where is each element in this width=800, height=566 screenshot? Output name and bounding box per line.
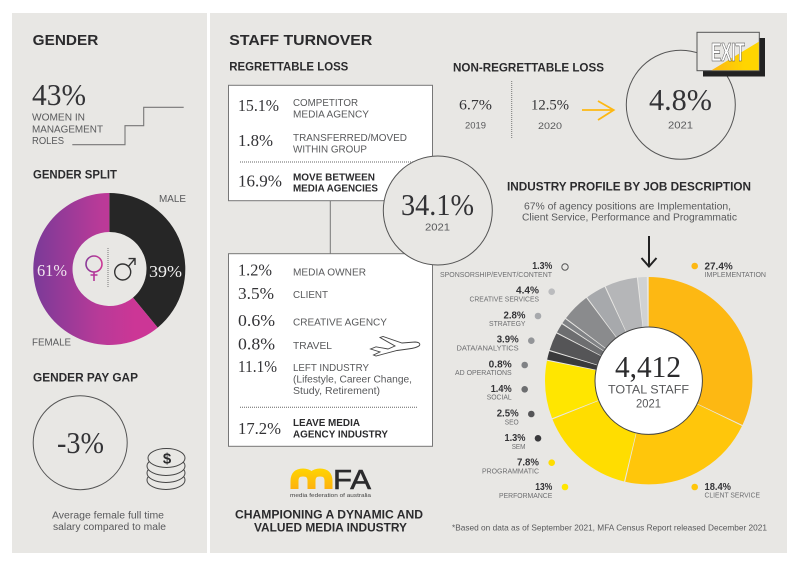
stat: women in management: WOMEN IN xyxy=(32,113,85,124)
text: industry profile intro: 67% of agency positions are Implementation, xyxy=(524,201,731,212)
legend: data/analytics xyxy=(456,335,535,353)
legend: implementation xyxy=(691,261,766,279)
legend: social xyxy=(487,384,528,402)
legend: sem: 1.3% xyxy=(504,433,526,444)
box: move between media agencies xyxy=(228,85,432,201)
box: leave media agency industry: 11.1% xyxy=(238,357,277,376)
legend: implementation: 27.4% xyxy=(704,261,733,272)
legend: ad operations: 0.8% xyxy=(489,359,512,370)
box: move between media agencies: MEDIA AGENCIES xyxy=(293,184,378,195)
heading: gender split: GENDER SPLIT xyxy=(33,168,118,182)
panel: staff turnover xyxy=(210,13,787,553)
legend: sem xyxy=(504,433,541,451)
donut centre: total staff xyxy=(595,327,702,434)
donut chart: gender split: 61% xyxy=(37,261,67,280)
legend: ad operations: AD OPERATIONS xyxy=(455,368,512,377)
footnote: *Based on data as of September 2021, MFA Census Report released December 2021 xyxy=(452,523,767,533)
legend: sem: SEM xyxy=(512,442,526,451)
legend: client service xyxy=(691,482,760,500)
heading: staff turnover: STAFF TURNOVER xyxy=(229,32,372,49)
icon: male symbol xyxy=(115,259,135,280)
legend: seo xyxy=(497,408,535,426)
legend: seo: 2.5% xyxy=(497,408,519,419)
text: tagline: CHAMPIONING A DYNAMIC AND xyxy=(235,509,423,521)
donut centre: total staff: 4,412 xyxy=(615,349,681,384)
heading: non-regrettable loss: NON-REGRETTABLE LOSS xyxy=(453,63,604,75)
legend: creative services xyxy=(470,286,555,304)
stat circle: total regrettable loss: 2021 xyxy=(425,223,450,234)
legend: strategy: STRATEGY xyxy=(489,319,526,328)
legend: data/analytics: DATA/ANALYTICS xyxy=(456,344,519,353)
legend: performance: 13% xyxy=(535,482,552,493)
legend: sponsorship: 1.3% xyxy=(532,261,552,272)
donut chart: gender split xyxy=(33,193,185,345)
box: leave media agency industry: 3.5% xyxy=(238,284,274,303)
box: leave media agency industry: AGENCY INDUSTRY xyxy=(293,429,388,440)
stat circle: non-regrettable 2021: 4.8% xyxy=(649,82,712,117)
heading: regrettable loss: REGRETTABLE LOSS xyxy=(229,62,349,74)
box: move between media agencies: WITHIN GROUP xyxy=(293,144,367,155)
label: male: MALE xyxy=(159,194,186,205)
box: move between media agencies: 1.8% xyxy=(238,131,273,150)
panel: gender xyxy=(12,13,207,553)
stat circle: total regrettable loss: 34.1% xyxy=(401,187,474,222)
icon: exit sign xyxy=(697,32,765,76)
stat: women in management: MANAGEMENT xyxy=(32,124,103,135)
legend: seo: SEO xyxy=(505,417,519,426)
box: leave media agency industry: TRAVEL xyxy=(293,341,332,352)
arrow: down to chart xyxy=(642,236,656,266)
box: leave media agency industry: MEDIA OWNER xyxy=(293,267,366,278)
box: leave media agency industry: LEFT INDUSTRY xyxy=(293,363,369,374)
legend: strategy: 2.8% xyxy=(504,310,526,321)
box: leave media agency industry: 1.2% xyxy=(238,261,272,280)
legend: creative services: 4.4% xyxy=(516,286,539,297)
legend: programmatic: 7.8% xyxy=(517,458,539,469)
legend: ad operations xyxy=(455,359,528,377)
legend: sponsorship: SPONSORSHIP/EVENT/CONTENT xyxy=(440,270,552,279)
box: leave media agency industry: CREATIVE AGENCY xyxy=(293,317,387,328)
text: industry profile intro: Client Service, Performance and Programmatic xyxy=(522,213,737,224)
logo: media federation of australia xyxy=(290,464,372,499)
legend: programmatic xyxy=(482,458,555,476)
text: pay gap caption xyxy=(52,511,166,533)
stat: 2019: 6.7% xyxy=(459,97,492,113)
text: tagline xyxy=(235,509,423,535)
legend: performance xyxy=(499,482,568,500)
box: move between media agencies: COMPETITOR xyxy=(293,98,358,109)
box: leave media agency industry: LEAVE MEDIA xyxy=(293,418,360,429)
icon: female symbol xyxy=(86,256,102,281)
arrow: to 2021 xyxy=(582,101,614,120)
legend: strategy xyxy=(489,310,541,328)
heading: gender pay gap: GENDER PAY GAP xyxy=(33,371,138,385)
stat circle: non-regrettable 2021: 2021 xyxy=(668,121,693,132)
text: pay gap caption: salary compared to male xyxy=(53,522,166,533)
box: leave media agency industry: 17.2% xyxy=(238,419,281,438)
stat: 2019 xyxy=(459,97,492,132)
legend: sponsorship xyxy=(440,261,568,279)
box: leave media agency industry: 0.8% xyxy=(238,335,275,354)
text: industry profile intro xyxy=(522,201,737,224)
icon: exit sign: EXIT xyxy=(711,37,745,67)
icon: coins xyxy=(147,448,185,490)
legend: social: SOCIAL xyxy=(487,393,512,402)
stat: 2020 xyxy=(531,98,569,132)
stat circle: total regrettable loss xyxy=(383,156,492,265)
box: move between media agencies: MOVE BETWEEN xyxy=(293,172,375,183)
stat circle: pay gap xyxy=(33,396,127,490)
label: female: FEMALE xyxy=(32,338,71,349)
donut chart: gender split: 39% xyxy=(149,262,182,281)
legend: data/analytics: 3.9% xyxy=(497,335,519,346)
stat circle: pay gap: -3% xyxy=(57,425,104,460)
stat: 2020: 12.5% xyxy=(531,98,569,114)
icon: plane xyxy=(370,336,420,356)
logo: media federation of australia: media federation of australia xyxy=(290,493,372,499)
icon: stairs xyxy=(72,107,184,145)
legend: client service: CLIENT SERVICE xyxy=(704,491,760,500)
legend: programmatic: PROGRAMMATIC xyxy=(482,467,540,476)
box: leave media agency industry: CLIENT xyxy=(293,290,328,301)
box: move between media agencies: TRANSFERRED/MOVED xyxy=(293,133,407,144)
donut chart: job description xyxy=(570,302,727,459)
icon: coins: $ xyxy=(163,450,172,468)
heading: industry profile: INDUSTRY PROFILE BY JOB DESCRIPTION xyxy=(507,182,751,194)
logo: media federation of australia: FA xyxy=(333,464,371,495)
legend: implementation: IMPLEMENTATION xyxy=(704,270,766,279)
stat: 2020: 2020 xyxy=(538,121,562,132)
donut centre: total staff: 2021 xyxy=(636,396,661,410)
legend: creative services: CREATIVE SERVICES xyxy=(470,295,539,304)
legend: performance: PERFORMANCE xyxy=(499,491,552,500)
stat: women in management: 43% xyxy=(32,77,86,112)
donut centre: total staff: TOTAL STAFF xyxy=(608,382,689,396)
legend: social: 1.4% xyxy=(491,384,512,395)
box: move between media agencies: 15.1% xyxy=(238,96,279,115)
stat: women in management: ROLES xyxy=(32,136,64,147)
stat: 2019: 2019 xyxy=(465,121,486,132)
box: leave media agency industry: (Lifestyle, Career Change, xyxy=(293,374,412,385)
stat: women in management xyxy=(32,77,103,147)
box: move between media agencies: MEDIA AGENCY xyxy=(293,109,369,120)
box: leave media agency industry xyxy=(228,254,432,446)
text: pay gap caption: Average female full time xyxy=(52,511,164,522)
text: tagline: VALUED MEDIA INDUSTRY xyxy=(254,523,407,535)
legend: client service: 18.4% xyxy=(704,482,731,493)
box: leave media agency industry: Study, Retirement) xyxy=(293,386,380,397)
heading: gender: GENDER xyxy=(33,32,98,49)
box: move between media agencies: 16.9% xyxy=(238,172,282,191)
stat circle: non-regrettable 2021 xyxy=(626,50,735,159)
box: leave media agency industry: 0.6% xyxy=(238,311,275,330)
